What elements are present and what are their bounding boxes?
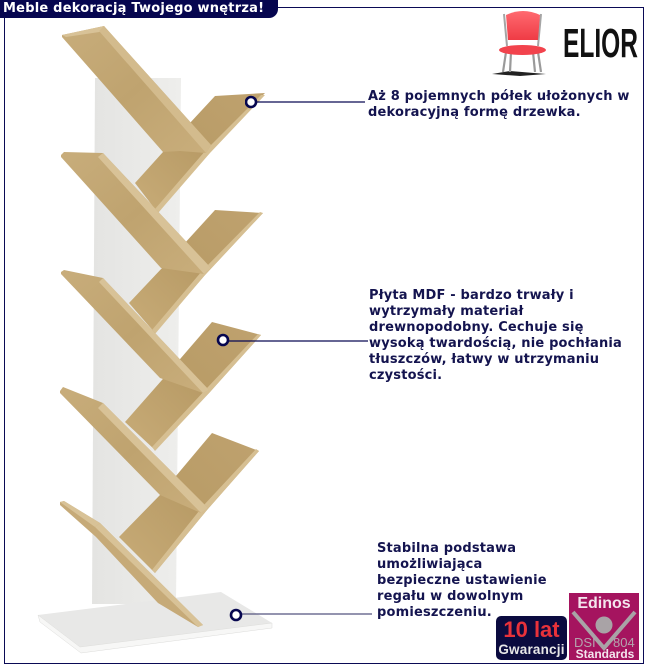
callout text: shelves: Aż 8 pojemnych półek ułożonych w [368, 89, 630, 104]
badge caption: Gwarancji [498, 642, 565, 657]
badge: Edinos DSI 804 standards: Edinos [577, 595, 631, 612]
callout marker and leader line [216, 334, 368, 346]
shelves, tier 1 [62, 26, 211, 153]
callout text: MDF material: tłuszczów, łatwy w utrzymaniu [369, 352, 599, 367]
shelves, tier 2 [61, 93, 265, 274]
callout: MDF material [216, 288, 622, 383]
callout text: stable base: bezpieczne ustawienie [377, 573, 547, 588]
shelves, tier 5 [60, 433, 259, 627]
white back panel [92, 78, 181, 604]
callout text: MDF material: czystości. [369, 368, 442, 383]
callout text: shelves: dekoracyjną formę drzewka. [368, 105, 581, 120]
callout text: stable base [377, 541, 547, 620]
callout text: stable base: umożliwiająca [377, 557, 482, 572]
callout text: stable base: pomieszczeniu. [377, 605, 492, 620]
badge heading: 10 lat [503, 617, 560, 642]
badge: Edinos DSI 804 standards: DSI [574, 635, 596, 650]
badge: Edinos DSI 804 standards: 804 [613, 635, 635, 650]
callout: shelves [245, 89, 630, 120]
white base [38, 592, 272, 653]
icon: red chair logo [492, 11, 546, 76]
callout marker and leader line [230, 608, 372, 622]
shelves, tier 4 [60, 322, 261, 513]
badge: Edinos DSI 804 standards [569, 593, 639, 660]
callout text: shelves [368, 89, 630, 120]
title banner: Meble dekoracją Twojego wnętrza! [3, 1, 264, 16]
callout text: MDF material: drewnopodobny. Cechuje się [369, 320, 584, 335]
callout text: stable base: Stabilna podstawa [377, 541, 516, 556]
badge: 10 year warranty [496, 616, 567, 660]
callout text: MDF material: Płyta MDF - bardzo trwały i [369, 288, 574, 303]
callout text: MDF material: wysoką twardością, nie pochłania [369, 336, 622, 351]
callout marker and leader line [245, 96, 365, 108]
callout: stable base [230, 541, 547, 622]
shelves, tier 3 [61, 210, 263, 393]
callout text: MDF material: wytrzymały materiał [369, 304, 524, 319]
callout text: MDF material [369, 288, 622, 383]
callout text: stable base: regału w dowolnym [377, 589, 523, 604]
